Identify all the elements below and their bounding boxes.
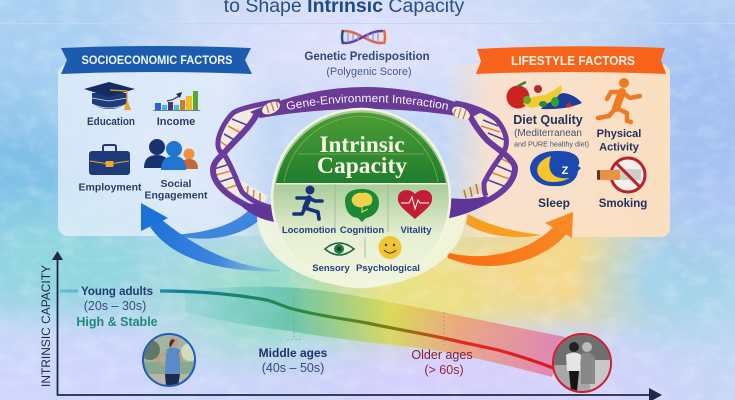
y axis label: INTRINSIC CAPACITY — [41, 265, 53, 387]
label: education: Education — [87, 116, 135, 128]
photo: young runner — [140, 334, 199, 388]
label: sleep: Sleep — [538, 196, 570, 210]
label: locomotion: Locomotion — [282, 225, 336, 236]
label: young adults: Young adults — [81, 286, 153, 298]
icon: sleep moon — [530, 151, 581, 186]
label: psychological: Psychological — [356, 263, 420, 274]
icon: briefcase — [89, 145, 130, 175]
trajectory line — [60, 291, 556, 369]
label: middle age range: (40s – 50s) — [262, 361, 324, 375]
label: smoking: Smoking — [599, 198, 647, 210]
central circle: intrinsic capacity — [272, 109, 450, 287]
panel: socioeconomic factors — [58, 46, 275, 236]
label: physical activity: Physical — [597, 128, 641, 140]
label: older age range: (> 60s) — [424, 363, 464, 377]
icon: dna — [342, 30, 385, 44]
label: diet note: (Mediterranean — [514, 128, 582, 139]
icon: runner — [598, 78, 640, 122]
banner: lifestyle factors: LIFESTYLE FACTORS — [511, 54, 635, 68]
shaded trajectory band — [185, 287, 565, 377]
label: cognition: Cognition — [340, 225, 384, 236]
lower bowl of central badge — [257, 214, 465, 286]
dna helix: right — [449, 103, 515, 218]
icon: people — [144, 139, 198, 170]
label: middle ages: Middle ages — [259, 346, 328, 360]
genetic predisposition — [304, 30, 430, 78]
banner: socioeconomic factors — [61, 46, 252, 74]
interaction arc band — [250, 87, 482, 118]
icon: psychological smiley — [378, 236, 402, 259]
chart: intrinsic capacity over age — [41, 251, 662, 400]
banner: socioeconomic factors: SOCIOECONOMIC FACTORS — [82, 53, 232, 67]
label: social engagement: Social — [161, 178, 191, 190]
icon: locomotion runner — [294, 186, 322, 219]
label: social engagement: Engagement — [144, 190, 208, 202]
dna loops and interaction arc — [210, 87, 518, 222]
panel: lifestyle factors — [445, 46, 670, 237]
label: vitality: Vitality — [401, 225, 432, 236]
label: employment: Employment — [78, 182, 142, 194]
label: income: Income — [157, 116, 195, 128]
small dna lobes on arc — [260, 99, 472, 122]
label: young age range: (20s – 30s) — [84, 299, 146, 313]
icon: sensory eye — [325, 243, 354, 255]
label: older ages: Older ages — [411, 348, 473, 362]
icon: graduation cap — [84, 82, 135, 110]
icon: income bars — [153, 91, 200, 111]
icon: no smoking — [597, 158, 645, 192]
y axis — [52, 251, 63, 396]
banner: lifestyle factors — [476, 46, 666, 74]
label: sensory: Sensory — [312, 263, 350, 274]
icon: healthy food — [506, 82, 582, 109]
label: physical activity: Activity — [599, 142, 640, 154]
arrow: orange to lifestyle — [446, 212, 573, 266]
title: intrinsic: Intrinsic — [320, 132, 404, 157]
label: diet quality: Diet Quality — [513, 113, 583, 127]
x axis — [57, 388, 662, 400]
label: high and stable: High & Stable — [76, 315, 158, 329]
label: polygenic score: (Polygenic Score) — [326, 66, 412, 78]
icon: sleep moon: Z — [562, 165, 569, 177]
icon: vitality heart — [398, 190, 432, 219]
label: diet note: and PURE healthy diet) — [514, 140, 589, 148]
icon: cognition brain — [345, 189, 379, 222]
label: gene-environment interaction: Gene-Environment Interaction — [286, 94, 448, 110]
dna helix: left — [212, 101, 280, 222]
label: genetic predisposition: Genetic Predisposition — [304, 51, 430, 63]
arrow: blue to socioeconomic — [141, 203, 280, 272]
title: capacity: Capacity — [317, 153, 407, 179]
photo: older couple — [553, 334, 612, 392]
